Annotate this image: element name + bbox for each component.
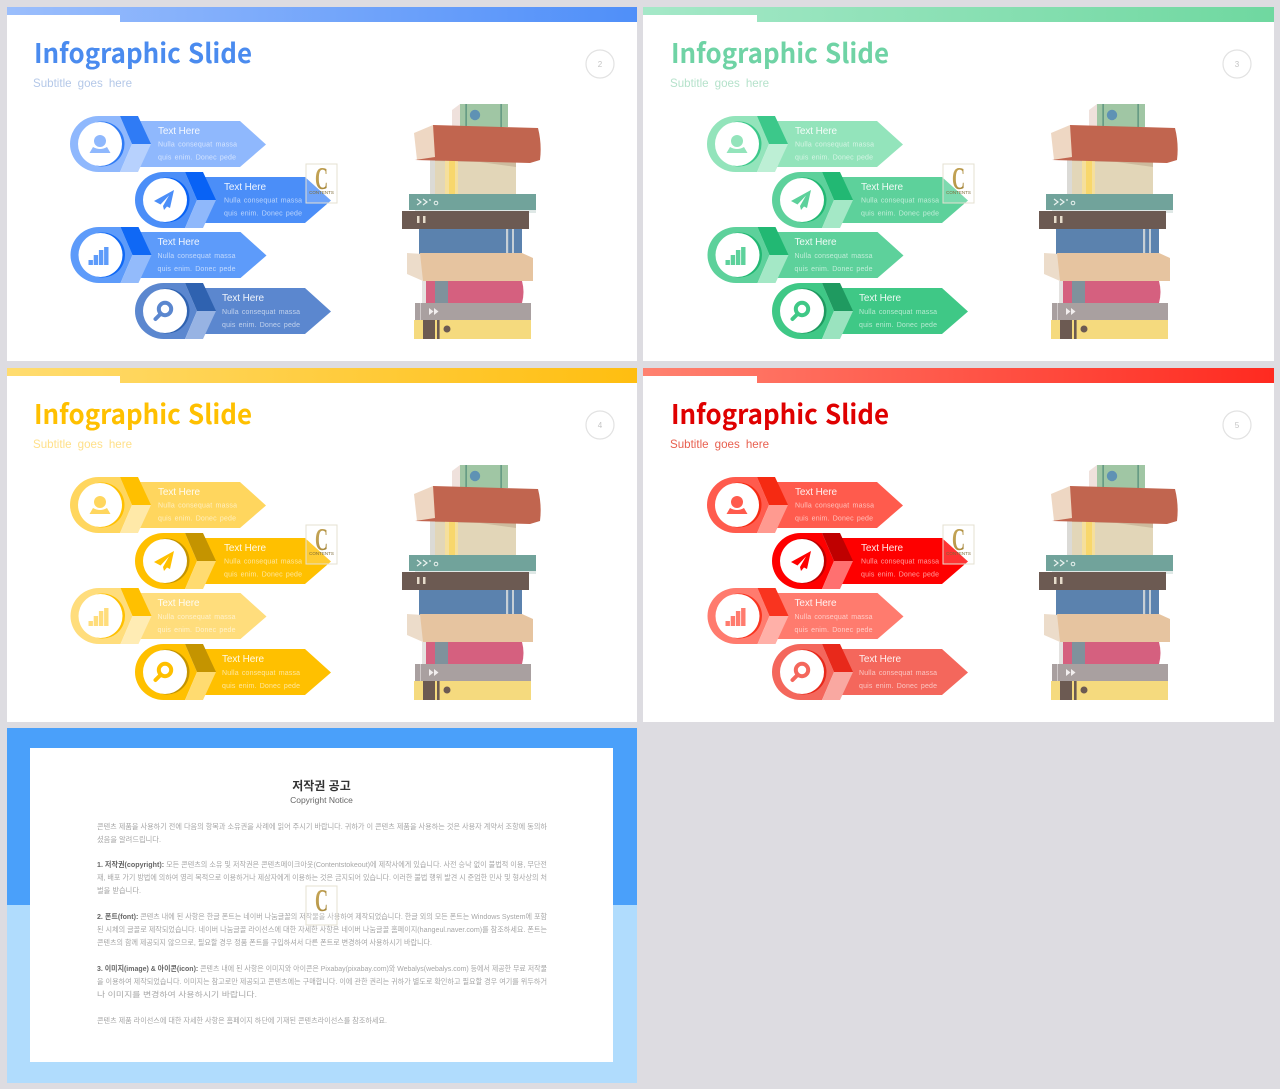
- arrow row 4: Text Here: [859, 293, 901, 304]
- panel: red slide: [643, 368, 1274, 722]
- clause 1: copyright: 재, 배포 가기 방법에 의하여 영리 목적으로 이용하거나 제삼자에게 이용하는 것은 금지되어 있습니다. 이러한 불법 행위 발견 시 준엄한 민사 및 형사상의 처: [97, 872, 547, 882]
- watermark logo: [943, 160, 974, 203]
- clause 2: font: [97, 911, 547, 947]
- intro paragraph: 콘텐츠 제품을 사용하기 전에 다음의 항목과 소유권을 사례에 읽어 주시기 바랍니다. 귀하가 이 콘텐츠 제품을 사용하는 것은 사용자 계약서 조항에 동의하: [97, 821, 547, 831]
- illustration: stack of books: [1039, 104, 1178, 339]
- watermark logo: [306, 521, 337, 564]
- arrow row 2: quis enim. Donec pede: [861, 210, 939, 218]
- watermark logo: CONTENTS: [946, 190, 971, 195]
- arrow row 1: [707, 477, 903, 533]
- watermark logo: C: [315, 521, 328, 557]
- arrow row 2: [772, 533, 968, 589]
- page number: 3: [1235, 60, 1240, 69]
- watermark logo: CONTENTS: [309, 551, 334, 556]
- panel: yellow slide: [7, 368, 637, 722]
- arrow row 1: [707, 116, 903, 172]
- title: Infographic Slide: [34, 32, 252, 71]
- title: Infographic Slide: [671, 393, 889, 432]
- arrow row 4: Text Here: [222, 293, 264, 304]
- clause 1: copyright: 벌을 받습니다.: [97, 885, 141, 895]
- arrow row 4: quis enim. Donec pede: [222, 322, 300, 329]
- arrow row 4: [135, 283, 331, 339]
- page number: [586, 50, 614, 78]
- title: Infographic Slide: [671, 32, 889, 71]
- arrow row 3: Nulla consequat massa: [794, 253, 873, 260]
- arrow row 3: quis enim. Donec pede: [794, 627, 873, 634]
- arrow row 1: [70, 116, 266, 172]
- arrow row 3: Text Here: [158, 598, 200, 609]
- arrow row 2: [772, 172, 968, 228]
- arrow row 4: quis enim. Donec pede: [222, 683, 300, 690]
- arrow row 2: [135, 172, 331, 228]
- page number: [1223, 411, 1251, 439]
- arrow row 3: [708, 588, 904, 644]
- arrow row 2: [135, 533, 331, 589]
- arrow row 3: [70, 227, 266, 283]
- arrow row 4: Text Here: [859, 654, 901, 665]
- arrow row 1: Nulla consequat massa: [158, 142, 237, 148]
- clause 3: image and icon: [97, 963, 547, 999]
- arrow row 1: quis enim. Donec pede: [795, 154, 873, 162]
- clause 2: font: 콘텐츠의 함께 제공되지 않으므로, 필요할 경우 정품 폰트를 구입하셔서 다른 폰트로 변경하여 사용하시기 바랍니다.: [97, 937, 432, 947]
- title: Infographic Slide: [34, 393, 252, 432]
- watermark logo: C: [952, 521, 965, 557]
- arrow row 1: [70, 477, 266, 533]
- clause 3: image and icon: 나 이미지를 변경하여 사용하시기 바랍니다.: [97, 989, 257, 999]
- intro paragraph: [97, 821, 547, 844]
- clause 3: image and icon: 을 이용하여 제작되었습니다. 이미지는 참고로만 제공되고 콘텐츠에는 구매합니다. 이에 관한 권리는 귀하가 별도로 확인하고 필요할 경우 여기를 위두하거: [97, 976, 547, 986]
- arrow row 4: Nulla consequat massa: [859, 670, 937, 677]
- arrow row 4: quis enim. Donec pede: [859, 683, 937, 690]
- page number: 2: [598, 60, 603, 69]
- arrow row 2: quis enim. Donec pede: [224, 572, 302, 578]
- arrow row 2: Nulla consequat massa: [861, 558, 939, 566]
- arrow row 2: Nulla consequat massa: [224, 558, 302, 566]
- watermark logo: C: [952, 160, 965, 196]
- arrow row 2: Text Here: [861, 182, 903, 193]
- arrow row 4: [135, 644, 331, 700]
- arrow row 4: [772, 644, 968, 700]
- arrow row 3: quis enim. Donec pede: [794, 266, 873, 273]
- arrow row 1: quis enim. Donec pede: [795, 516, 873, 522]
- arrow row 1: Nulla consequat massa: [795, 142, 874, 148]
- yellow header bar: [7, 368, 637, 383]
- arrow row 1: Nulla consequat massa: [158, 502, 237, 510]
- arrow row 3: Nulla consequat massa: [794, 614, 873, 621]
- arrow row 2: quis enim. Donec pede: [224, 210, 302, 218]
- illustration: stack of books: [402, 465, 541, 700]
- panel: blue slide: [7, 7, 637, 361]
- subtitle: Subtitle goes here: [670, 437, 769, 451]
- arrow row 1: Text Here: [795, 487, 837, 498]
- arrow row 3: Text Here: [158, 237, 200, 248]
- green header bar: [643, 7, 1274, 22]
- page number: 4: [598, 421, 603, 430]
- illustration: stack of books: [402, 104, 541, 339]
- arrow row 2: Text Here: [224, 182, 266, 193]
- illustration: stack of books: [1039, 465, 1178, 700]
- arrow row 1: Text Here: [158, 126, 200, 137]
- subtitle: Subtitle goes here: [670, 76, 769, 90]
- watermark logo: [943, 521, 974, 564]
- intro paragraph: 셨음을 알려드립니다.: [97, 834, 161, 844]
- arrow row 3: quis enim. Donec pede: [158, 627, 236, 634]
- arrow row 1: Text Here: [158, 487, 200, 498]
- arrow row 1: quis enim. Donec pede: [158, 154, 236, 162]
- closing line: 콘텐츠 제품 라이선스에 대한 자세한 사항은 홈페이지 하단에 기재된 콘텐츠라이선스를 참조하세요.: [97, 1015, 387, 1025]
- notice subheading: Copyright Notice: [290, 795, 353, 805]
- panel: green slide: [643, 7, 1274, 361]
- clause 2: font: 2. 폰트(font): 콘텐츠 내에 된 사항은 한글 폰트는 네이버 나눔글꼴의 저작물을 사용하여 제작되었습니다. 한글 외의 모든 폰트는 Windows System에 포함: [97, 911, 547, 921]
- red header bar: [643, 368, 1274, 383]
- blue header bar: [7, 7, 637, 22]
- clause 1: copyright: 1. 저작권(copyright): 모든 콘텐츠의 소유 및 저작권은 콘텐츠메이크아웃(Contentstokeout)에 제작사에게 있습니다. 사전 승낙 없이 불법적 이용, 무단전: [97, 859, 547, 869]
- arrow row 4: quis enim. Donec pede: [859, 322, 937, 329]
- watermark logo: C: [315, 160, 328, 196]
- page number: [1223, 50, 1251, 78]
- arrow row 3: Text Here: [794, 237, 837, 248]
- arrow row 3: Text Here: [794, 598, 837, 609]
- arrow row 2: Text Here: [224, 543, 266, 554]
- notice heading: 저작권 공고: [292, 778, 351, 793]
- page number: [586, 411, 614, 439]
- arrow row 3: [70, 588, 266, 644]
- arrow row 2: quis enim. Donec pede: [861, 572, 939, 578]
- arrow row 2: Nulla consequat massa: [861, 198, 939, 204]
- panel: copyright notice: [7, 728, 637, 1083]
- arrow row 4: Nulla consequat massa: [222, 309, 300, 316]
- watermark logo: CONTENTS: [309, 190, 334, 195]
- arrow row 3: [708, 227, 904, 283]
- arrow row 2: Nulla consequat massa: [224, 198, 302, 204]
- arrow row 3: Nulla consequat massa: [158, 614, 236, 621]
- subtitle: Subtitle goes here: [33, 437, 132, 451]
- arrow row 3: Nulla consequat massa: [158, 253, 236, 260]
- clause 1: copyright: [97, 859, 547, 895]
- arrow row 3: quis enim. Donec pede: [158, 266, 236, 273]
- arrow row 1: quis enim. Donec pede: [158, 516, 236, 522]
- arrow row 4: Nulla consequat massa: [859, 309, 937, 316]
- arrow row 4: [772, 283, 968, 339]
- subtitle: Subtitle goes here: [33, 76, 132, 90]
- arrow row 2: Text Here: [861, 543, 903, 554]
- watermark logo: CONTENTS: [946, 551, 971, 556]
- arrow row 1: Nulla consequat massa: [795, 502, 874, 510]
- arrow row 1: Text Here: [795, 126, 837, 137]
- watermark logo: [306, 882, 337, 925]
- arrow row 4: Nulla consequat massa: [222, 670, 300, 677]
- clause 2: font: 된 시체의 글꼴로 제작되었습니다. 네이버 나눔글꼴 라이선스에 대한 자세한 사항은 네이버 나눔글꼴 홈페이지(hangeul.naver.com)를 참조하세요. 폰트는: [97, 924, 547, 934]
- arrow row 4: Text Here: [222, 654, 264, 665]
- watermark logo: C: [315, 882, 328, 918]
- page number: 5: [1235, 421, 1240, 430]
- clause 3: image and icon: 3. 이미지(image) & 아이콘(icon): 콘텐츠 내에 된 사항은 이미지와 아이콘은 Pixabay(pixabay.com)와 Webalys(webalys.com) 등에서 제공한 무료 저작물: [97, 963, 547, 973]
- watermark logo: [306, 160, 337, 203]
